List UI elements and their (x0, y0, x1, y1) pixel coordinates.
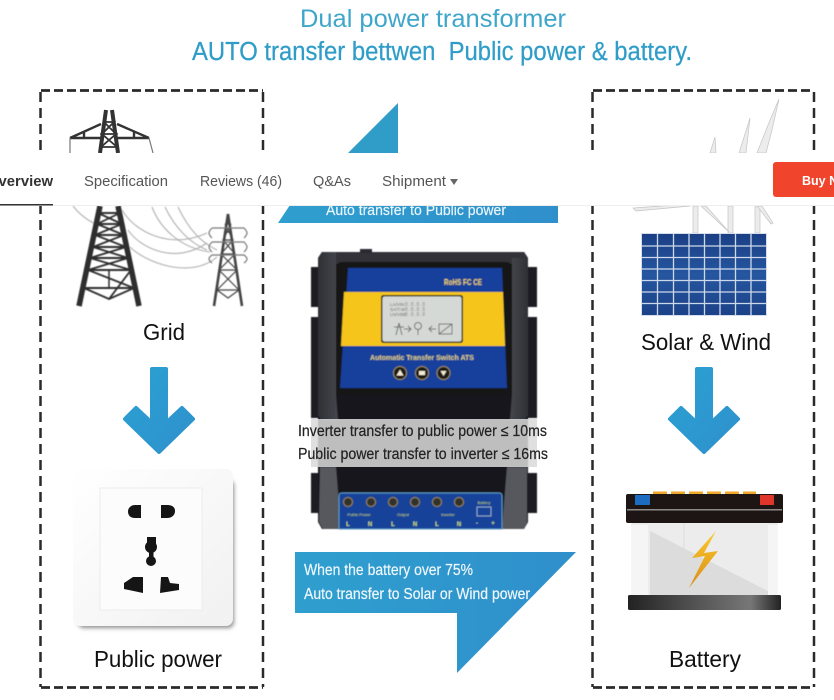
callout: battery over 75 percent (295, 552, 576, 673)
arrow: solar and wind to battery (670, 369, 738, 452)
front label (340, 268, 507, 388)
LCD screen: 8.8.8.8 (405, 307, 426, 313)
LCD screen: SA/T.W (390, 307, 406, 312)
side mounting tabs (311, 267, 537, 513)
front label: RoHS FC CE (444, 277, 482, 287)
LCD screen: 8.8.8.8 (405, 302, 426, 308)
terminal panel: N (368, 522, 372, 528)
LCD screen (381, 295, 463, 343)
device: automatic transfer switch (311, 249, 537, 529)
front label: Automatic Transfer Switch ATS (370, 355, 474, 362)
terminal panel: N (457, 522, 461, 528)
callout: transfer to public power (278, 103, 558, 223)
icon: solar panel (641, 233, 767, 316)
display bezel (336, 262, 512, 395)
control buttons (394, 366, 450, 380)
callout: transfer to public power: Auto transfer to Public power (326, 202, 506, 219)
panel: transfer timing (298, 419, 548, 467)
title (192, 5, 692, 66)
navigation bar: Specification (84, 174, 168, 190)
label: Solar & Wind: Solar & Wind (641, 329, 771, 355)
navigation bar: Reviews (46) (200, 174, 282, 190)
callout: battery over 75 percent: When the battery over 75% (304, 562, 473, 579)
terminal panel: + (491, 521, 495, 527)
terminal panel: L (346, 522, 350, 528)
LCD screen: LA/VIN (390, 302, 404, 307)
icon: large pylon top (70, 110, 153, 153)
device body (318, 252, 528, 529)
label: Battery: Battery (669, 646, 741, 672)
arrow: grid to public power (125, 369, 193, 452)
icon: power lines and pylons (73, 206, 247, 306)
panel: transfer timing: Inverter transfer to public power ≤ 10ms (298, 423, 547, 440)
panel: solar wind and battery source (592, 90, 814, 688)
navigation bar (0, 153, 834, 206)
terminal panel: Battery (478, 500, 490, 505)
panel: transfer timing: Public power transfer to inverter ≤ 16ms (298, 446, 548, 463)
terminal panel: N (413, 522, 417, 528)
terminal panel (339, 493, 502, 529)
navigation bar: Shipment (382, 174, 446, 190)
terminal panel: L (435, 522, 439, 528)
icon: wind turbine blades (633, 99, 779, 233)
terminal panel: L (391, 522, 395, 528)
LCD screen: LN/VBB (390, 312, 406, 317)
panel: grid and public power source (40, 90, 263, 688)
navigation bar: Q&As (313, 174, 351, 190)
title: AUTO transfer bettwen Public power & battery. (192, 38, 692, 66)
LCD screen: 8.8.8.8 (405, 312, 426, 318)
icon: battery (626, 492, 783, 610)
terminal panel: Inverter (441, 512, 455, 517)
callout: battery over 75 percent: Auto transfer to Solar or Wind power (304, 586, 531, 603)
icon: wall socket (73, 469, 234, 628)
button: Buy Now (773, 162, 834, 197)
terminal panel: Public Power (347, 512, 371, 517)
label: Grid: Grid (143, 319, 185, 345)
terminal panel: - (476, 521, 478, 527)
terminal panel: Output (397, 512, 410, 517)
title: Dual power transformer (300, 5, 566, 33)
label: Public power: Public power (94, 646, 222, 672)
